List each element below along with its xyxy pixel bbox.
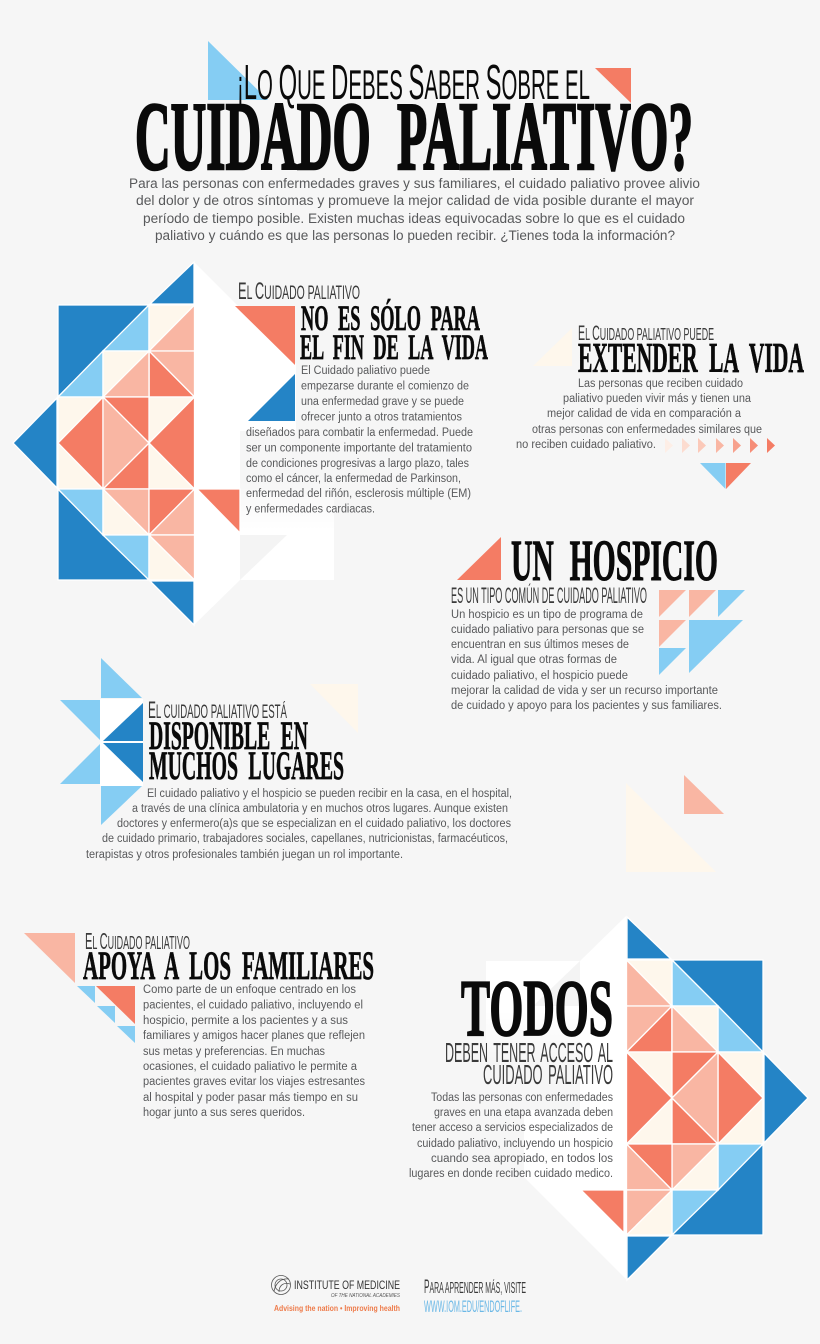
body text: pacientes graves evitar los viajes estresantes (143, 1076, 365, 1088)
icon: cream triangle (533, 328, 572, 366)
white star backdrop (194, 262, 334, 625)
icon: cream triangle (310, 684, 358, 733)
body text (246, 365, 473, 516)
body text: Como parte de un enfoque centrado en los (143, 984, 356, 996)
icon: institute logo (272, 1276, 290, 1294)
panel: todos: CUIDADO PALIATIVO (483, 1059, 613, 1090)
body text (451, 609, 722, 712)
body text (86, 788, 512, 861)
intro paragraph (129, 176, 700, 243)
panel: todos: DEBEN TENER ACCESO AL (445, 1037, 613, 1068)
title line 1: ¡LO QUE DEBES SABER SOBRE EL (237, 56, 590, 110)
body text: empezarse durante el comienzo de (301, 380, 469, 392)
heading: NO ES SÓLO PARA (301, 298, 480, 338)
icon: two triangles (700, 463, 751, 489)
icon: triangle cluster (24, 933, 135, 1043)
tagline: Advising the nation • Improving health (274, 1303, 400, 1313)
body text: terapistas y otros profesionales también juegan un rol importante. (86, 849, 403, 861)
icon: light salmon triangle (684, 775, 724, 814)
white star backdrop (486, 916, 626, 1279)
panel: disponible en muchos lugares (60, 658, 512, 861)
text: WWW.IOM.EDU/ENDOFLIFE. (424, 1297, 522, 1316)
body text: como el cáncer, la enfermedad de Parkinson, (246, 473, 461, 485)
panel: todos (409, 916, 808, 1280)
body text: graves en una etapa avanzada deben (434, 1107, 613, 1119)
icon: salmon triangle (595, 68, 631, 103)
body text: de cuidado y apoyo para los pacientes y sus familiares. (451, 700, 722, 712)
heading (300, 298, 488, 367)
icon: blue pinwheel star (60, 658, 143, 825)
body text: no reciben cuidado paliativo. (516, 439, 656, 451)
body text: cuidado paliativo para personas que se (451, 624, 644, 636)
body text: a través de una clínica ambulatoria y en muchos otros lugares. Aunque existen (132, 803, 508, 815)
body text: mejor calidad de vida en comparación a (547, 408, 742, 420)
heading kicker (445, 1037, 613, 1090)
body text: familiares y amigos hacer planes que reflejen (143, 1030, 365, 1042)
heading: TODOS (461, 965, 613, 1053)
intro paragraph: período de tiempo posible. Existen muchas ideas equivocadas sobre lo que es el cuidado (143, 211, 685, 226)
body text (516, 378, 762, 451)
panel: apoya a los familiares (24, 928, 374, 1119)
icon: large cream triangle (626, 783, 716, 872)
heading (149, 713, 344, 788)
body text: ocasiones, el cuidado paliativo le permite a (143, 1061, 358, 1073)
body text (143, 984, 365, 1119)
body text: tener acceso a servicios especializados de (412, 1122, 613, 1134)
icon: salmon triangle (235, 306, 295, 365)
body text: Las personas que reciben cuidado (578, 378, 743, 390)
body text: una enfermedad grave y se puede (301, 396, 464, 408)
intro paragraph: Para las personas con enfermedades graves y sus familiares, el cuidado paliativo provee alivio (129, 176, 700, 191)
body text: de cuidado primario, trabajadores sociales, capellanes, nutricionistas, farmacéuticos, (102, 833, 508, 845)
body text: diseñados para combatir la enfermedad. Puede (246, 427, 473, 439)
body text: ser un componente importante del tratamiento (246, 442, 472, 454)
geometric star left (13, 262, 240, 625)
geometric star right (581, 917, 808, 1280)
body text: lugares en donde reciben cuidado medico. (409, 1168, 613, 1180)
body text: pacientes, el cuidado paliativo, incluyendo el (143, 1000, 363, 1012)
heading kicker: EL CUIDADO PALIATIVO PUEDE (578, 322, 714, 345)
body text (409, 1092, 613, 1180)
intro paragraph: paliativo y cuándo es que las personas lo pueden recibir. ¿Tienes toda la información? (155, 228, 675, 243)
body text: otras personas con enfermedades similares que (532, 424, 762, 436)
body text: El Cuidado paliativo puede (301, 365, 430, 377)
icon: row of arrows (665, 438, 775, 453)
body text: vida. Al igual que otras formas de (451, 654, 617, 666)
body text: ofrecer junto a otros tratamientos (301, 412, 462, 424)
heading kicker: EL CUIDADO PALIATIVO (238, 278, 360, 305)
body text: hogar junto a sus seres queridos. (143, 1107, 305, 1119)
body text: hospicio, permite a los pacientes y a sus (143, 1015, 348, 1027)
heading: DISPONIBLE EN (149, 713, 308, 758)
institute name: INSTITUTE OF MEDICINE (294, 1280, 400, 1292)
heading kicker: EL CUIDADO PALIATIVO (85, 928, 190, 954)
body text: El cuidado paliativo y el hospicio se pueden recibir en la casa, en el hospital, (147, 788, 512, 800)
icon: salmon triangle (457, 537, 501, 580)
body text: y enfermedades cardiacas. (246, 504, 375, 516)
icon: light blue triangle (208, 41, 268, 100)
text: PARA APRENDER MÁS, VISITE (424, 1277, 526, 1298)
body text: Un hospicio es un tipo de programa de (451, 609, 643, 621)
body text: sus metas y preferencias. En muchas (143, 1046, 325, 1058)
institute subtitle: OF THE NATIONAL ACADEMIES (331, 1293, 401, 1299)
body text: paliativo pueden vivir más y tienen una (563, 393, 752, 405)
panel: disponible en muchos lugares: MUCHOS LUGARES (149, 743, 344, 788)
panel: extender la vida (516, 322, 804, 489)
panel: un hospicio (451, 528, 745, 712)
body text: cuando sea apropiado, en todos los (431, 1153, 613, 1165)
body text: encuentran en sus últimos meses de (451, 639, 629, 651)
heading kicker: EL CUIDADO PALIATIVO ESTÁ (148, 697, 287, 724)
header (129, 41, 700, 243)
body text: cuidado paliativo, el hospicio puede (451, 670, 628, 682)
intro paragraph: del dolor y de otros síntomas y promueve la mejor calidad de vida posible durante el mayor (136, 193, 695, 208)
panel: no es solo para el fin de la vida (13, 262, 488, 625)
body text: cuidado paliativo, incluyendo un hospicio (417, 1138, 613, 1150)
heading: APOYA A LOS FAMILIARES (83, 943, 374, 988)
decorative triangles right (626, 775, 724, 872)
body text: Todas las personas con enfermedades (431, 1092, 613, 1104)
icon: blue triangle (248, 374, 295, 421)
heading: EL FIN DE LA VIDA (300, 327, 488, 367)
footer (272, 1276, 526, 1316)
body text: enfermedad del riñón, esclerosis múltiple (EM) (246, 488, 471, 500)
icon: triangle cluster (659, 590, 745, 675)
body text: doctores y enfermero(a)s que se especializan en el cuidado paliativo, los doctores (117, 818, 511, 830)
body text: de condiciones progresivas a largo plazo, tales (246, 458, 469, 470)
body text: al hospital y poder pasar más tiempo en su (143, 1092, 358, 1104)
body text: mejorar la calidad de vida y ser un recurso importante (451, 685, 718, 697)
